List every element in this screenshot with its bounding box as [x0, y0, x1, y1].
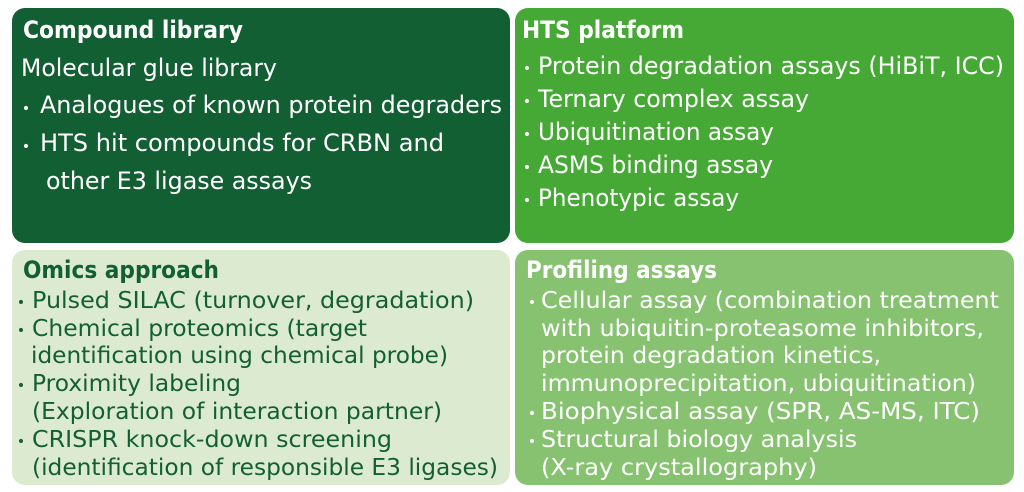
panel: HTS platform [515, 8, 1014, 243]
list: HTS assays: ・ [519, 154, 535, 178]
list: HTS assays: Phenotypic assay [538, 184, 739, 212]
list: profiling methods: immunoprecipitation, ubiquitination) [541, 369, 976, 397]
list: profiling methods: Structural biology analysis [541, 425, 857, 453]
heading: compound library: Compound library [23, 16, 243, 44]
heading: HTS platform: HTS platform [522, 16, 684, 44]
list: omics methods: (identification of responsible E3 ligases) [32, 453, 498, 481]
heading: omics approach: Omics approach [23, 256, 219, 284]
heading: profiling assays: Profiling assays [526, 256, 717, 284]
list: profiling methods: ・ [524, 428, 540, 452]
list: HTS assays: ・ [519, 187, 535, 211]
list: profiling methods: protein degradation kinetics, [541, 341, 881, 369]
list: HTS assays: ・ [519, 55, 535, 79]
list: omics methods: CRISPR knock-down screening [32, 425, 392, 453]
list: library contents [18, 91, 502, 195]
list: HTS assays: Protein degradation assays (HiBiT, ICC) [538, 52, 1004, 80]
list: omics methods: identification using chemical probe) [31, 341, 448, 369]
list: omics methods: ・ [13, 428, 29, 452]
list: profiling methods [524, 286, 999, 481]
list: HTS assays: ・ [519, 121, 535, 145]
list: HTS assays: ASMS binding assay [538, 151, 773, 179]
list: library contents: HTS hit compounds for CRBN and [40, 129, 444, 157]
list: library contents: Analogues of known protein degraders [40, 91, 502, 119]
list: library contents: ・ [18, 133, 34, 157]
list: omics methods: (Exploration of interaction partner) [32, 397, 442, 425]
list: library contents: ・ [18, 95, 34, 119]
list: omics methods: ・ [13, 289, 29, 313]
panel: omics approach [12, 250, 510, 485]
panel: profiling assays [515, 250, 1014, 485]
list: profiling methods: ・ [524, 289, 540, 313]
list: omics methods: Proximity labeling [32, 369, 241, 397]
list: omics methods: ・ [13, 317, 29, 341]
list: profiling methods: ・ [524, 400, 540, 424]
list: library contents: other E3 ligase assays [46, 167, 312, 195]
text: molecular glue library: Molecular glue library [21, 54, 277, 82]
list: HTS assays [519, 52, 1004, 212]
list: omics methods: Chemical proteomics (target [32, 314, 367, 342]
list: profiling methods: (X-ray crystallography) [541, 453, 817, 481]
list: HTS assays: ・ [519, 88, 535, 112]
list: profiling methods: Biophysical assay (SPR, AS-MS, ITC) [541, 397, 980, 425]
list: omics methods: Pulsed SILAC (turnover, degradation) [32, 286, 474, 314]
list: HTS assays: Ubiquitination assay [538, 118, 774, 146]
list: HTS assays: Ternary complex assay [537, 85, 809, 113]
panel: compound library [12, 8, 510, 243]
list: profiling methods: Cellular assay (combination treatment [541, 286, 999, 314]
list: profiling methods: with ubiquitin-proteasome inhibitors, [541, 314, 984, 342]
list: omics methods: ・ [13, 372, 29, 396]
list: omics methods [13, 286, 498, 481]
